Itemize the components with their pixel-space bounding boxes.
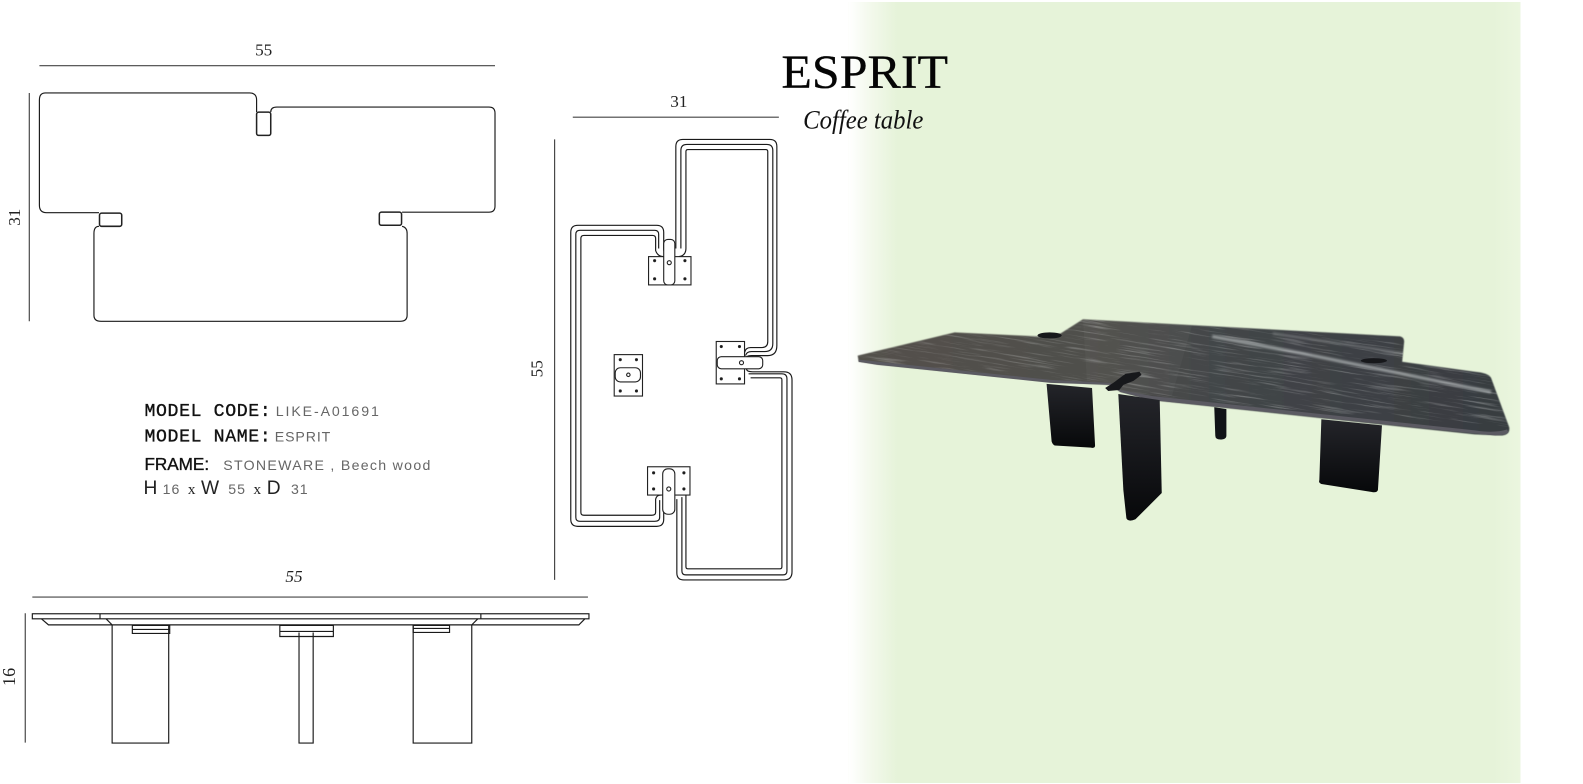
dimensions line: x	[188, 481, 196, 498]
table top surface	[858, 319, 1509, 435]
dimensions line: H	[143, 478, 157, 499]
product photo: coffee table illustration	[857, 318, 1510, 521]
front legs	[1118, 394, 1382, 521]
frame	[144, 454, 431, 474]
upper bracket	[649, 239, 691, 285]
centre leg	[280, 625, 333, 743]
connector clips	[1037, 332, 1387, 391]
centre bracket	[614, 355, 642, 396]
dimensions line: 16	[163, 481, 180, 497]
model code	[144, 402, 380, 422]
main white veining	[1212, 333, 1491, 392]
dimension: width 55: 55	[285, 567, 303, 586]
dimensions line: D	[267, 478, 281, 499]
dimension: width 55: 55	[255, 41, 272, 60]
model name	[144, 428, 331, 448]
title: ESPRIT	[781, 47, 948, 99]
dimensions line: 31	[291, 481, 309, 497]
dimensions line: x	[254, 481, 262, 498]
table top profile	[32, 614, 589, 625]
model code: MODEL CODE:	[144, 402, 271, 422]
side elevation drawing	[0, 567, 589, 743]
rear legs	[1047, 384, 1226, 448]
model name: MODEL NAME:	[144, 428, 271, 448]
subtitle: Coffee table	[803, 105, 924, 134]
model code: LIKE-A01691	[276, 403, 380, 419]
dimension: depth 31: 31	[5, 209, 24, 226]
lower right slab contour	[677, 369, 792, 580]
dimension: depth 31: 31	[670, 92, 687, 111]
left leg	[112, 625, 170, 743]
left slab contour	[571, 225, 666, 526]
table top outline	[39, 93, 495, 321]
connector tabs	[100, 112, 402, 226]
frame: STONEWARE , Beech wood	[223, 457, 431, 473]
dimensions line: W	[201, 478, 220, 499]
right bracket	[716, 341, 763, 384]
front edge of slab	[859, 360, 1508, 435]
lower bracket	[648, 467, 690, 514]
bracket plates and handles	[614, 239, 763, 514]
upper right slab contour	[676, 139, 777, 360]
right leg	[413, 625, 472, 743]
lighter rear slab reflection	[1083, 319, 1192, 396]
dimension: width 55: 55	[527, 360, 546, 377]
green background panel	[849, 2, 1520, 783]
top view drawing	[5, 41, 495, 321]
plan view drawing	[527, 92, 792, 580]
frame: FRAME:	[144, 454, 209, 474]
model name: ESPRIT	[275, 429, 331, 445]
dimensions line	[143, 478, 309, 499]
specification text	[143, 402, 431, 499]
stone texture	[862, 320, 1508, 426]
dimension: height 16	[0, 613, 25, 743]
dimensions line: 55	[228, 481, 246, 497]
